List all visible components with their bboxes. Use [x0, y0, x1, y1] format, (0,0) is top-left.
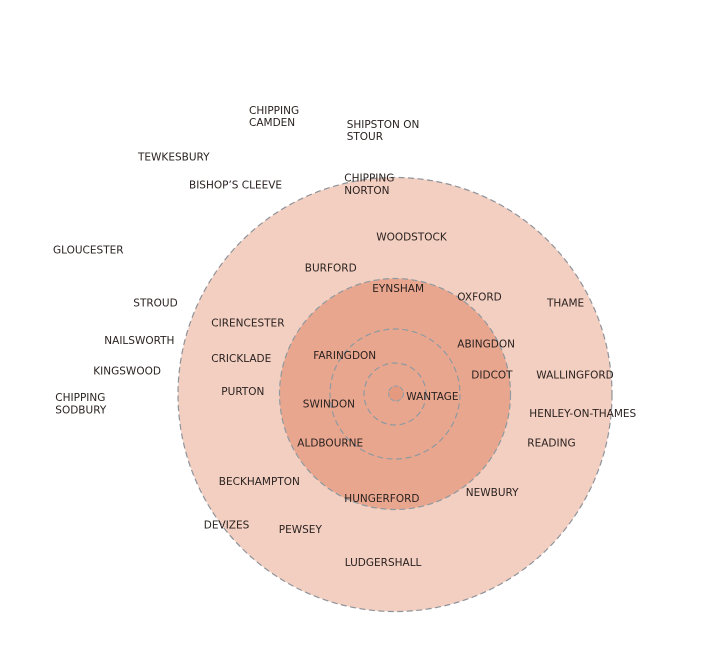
- label: Devizes: DEVIZES: [204, 520, 250, 532]
- label: Ludgershall: LUDGERSHALL: [345, 557, 422, 569]
- label: Chipping Sodbury: CHIPPING: [55, 392, 105, 404]
- label: Henley-on-Thames: HENLEY-ON-THAMES: [529, 408, 637, 420]
- label: Shipston on Stour: STOUR: [347, 131, 383, 143]
- label: Chipping Sodbury: SODBURY: [55, 404, 107, 416]
- label: Swindon: SWINDON: [303, 398, 355, 410]
- label: Nailsworth: NAILSWORTH: [104, 335, 174, 347]
- label: Purton: PURTON: [221, 386, 264, 398]
- small dashed ring: [364, 363, 426, 425]
- label: Burford: BURFORD: [305, 262, 357, 274]
- label: Chipping Norton: CHIPPING: [344, 172, 394, 184]
- place labels: [53, 105, 637, 569]
- label: Shipston on Stour: SHIPSTON ON: [347, 119, 419, 131]
- label: Chipping Camden: CHIPPING: [249, 105, 299, 117]
- label: Chipping Norton: NORTON: [344, 185, 389, 197]
- label: Kingswood: KINGSWOOD: [93, 366, 161, 378]
- label: Reading: READING: [527, 438, 576, 450]
- label: Wallingford: WALLINGFORD: [536, 370, 614, 382]
- label: Beckhampton: BECKHAMPTON: [219, 476, 300, 488]
- inner ring: [280, 278, 510, 510]
- label: Faringdon: FARINGDON: [313, 350, 376, 362]
- label: Abingdon: ABINGDON: [457, 338, 515, 350]
- label: Bishop's Cleeve: BISHOP’S CLEEVE: [189, 180, 282, 192]
- label: Oxford: OXFORD: [457, 292, 502, 304]
- label: Chipping Camden: CAMDEN: [249, 117, 295, 129]
- label: Hungerford: HUNGERFORD: [344, 493, 419, 505]
- label: Wantage: WANTAGE: [406, 391, 459, 403]
- middle dashed ring: [330, 329, 460, 459]
- label: Cirencester: CIRENCESTER: [211, 318, 284, 330]
- label: Stroud: STROUD: [133, 298, 178, 310]
- label: Gloucester: GLOUCESTER: [53, 244, 124, 256]
- label: Pewsey: PEWSEY: [279, 524, 322, 536]
- label: Newbury: NEWBURY: [466, 487, 519, 499]
- label: Didcot: DIDCOT: [471, 370, 513, 382]
- label: Cricklade: CRICKLADE: [211, 353, 271, 365]
- centre marker: Wantage: [388, 386, 404, 401]
- label: Aldbourne: ALDBOURNE: [297, 438, 363, 450]
- label: Woodstock: WOODSTOCK: [376, 232, 448, 244]
- label: Thame: THAME: [546, 298, 584, 310]
- label: Eynsham: EYNSHAM: [372, 283, 424, 295]
- outer ring: [178, 178, 612, 612]
- label: Tewkesbury: TEWKESBURY: [137, 152, 210, 164]
